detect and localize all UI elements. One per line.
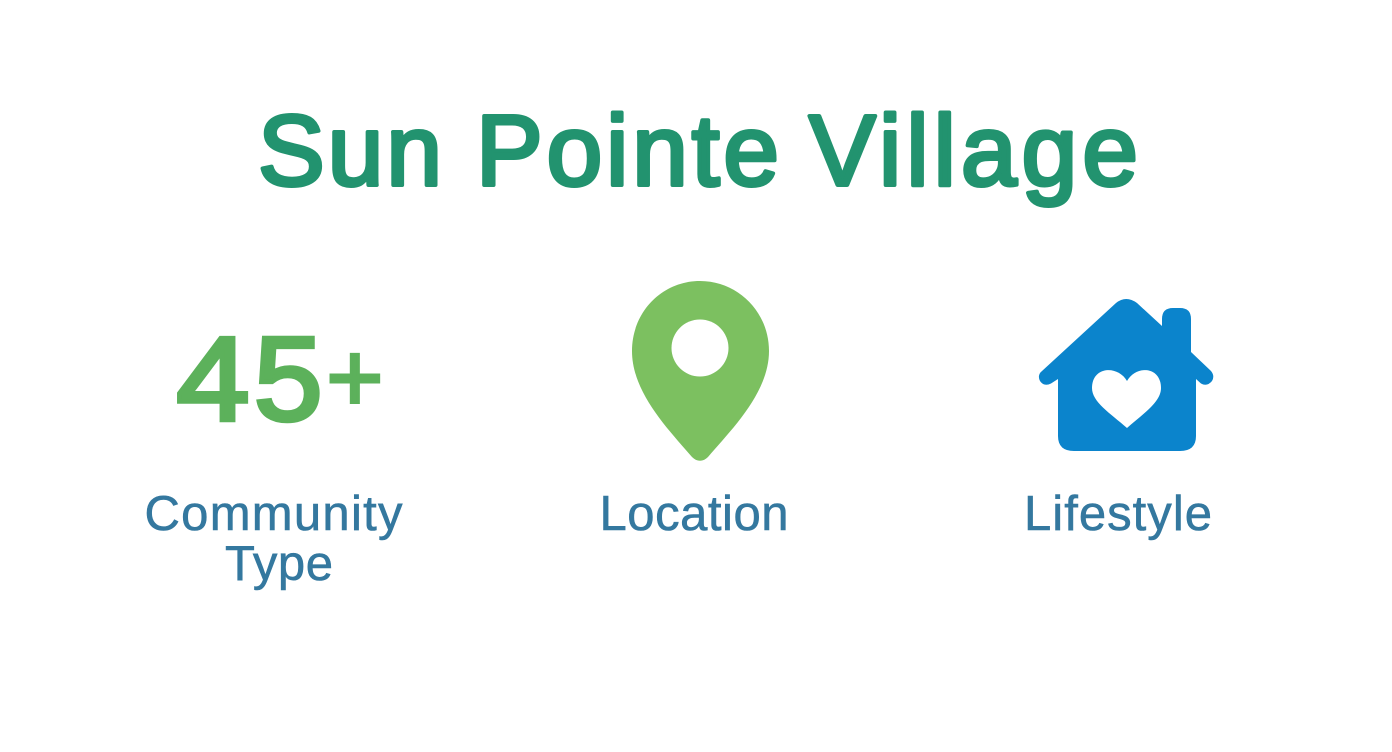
label: community type: Type (225, 537, 333, 591)
label: community type: Community (144, 487, 403, 541)
title: Pointe (476, 95, 779, 207)
title: Village (809, 95, 1138, 207)
label: lifestyle: Lifestyle (1024, 487, 1212, 541)
icon: house with heart (1039, 299, 1213, 451)
stat: 45+: 5 (254, 313, 322, 446)
stat: 45+: + (326, 322, 384, 432)
stat: 45+ (176, 313, 384, 446)
title: Sun (258, 95, 442, 207)
stat: 45+: 4 (176, 313, 250, 446)
icon: location pin (632, 281, 769, 461)
title (258, 95, 1138, 207)
label: location: Location (600, 487, 788, 541)
label: community type (144, 487, 403, 591)
